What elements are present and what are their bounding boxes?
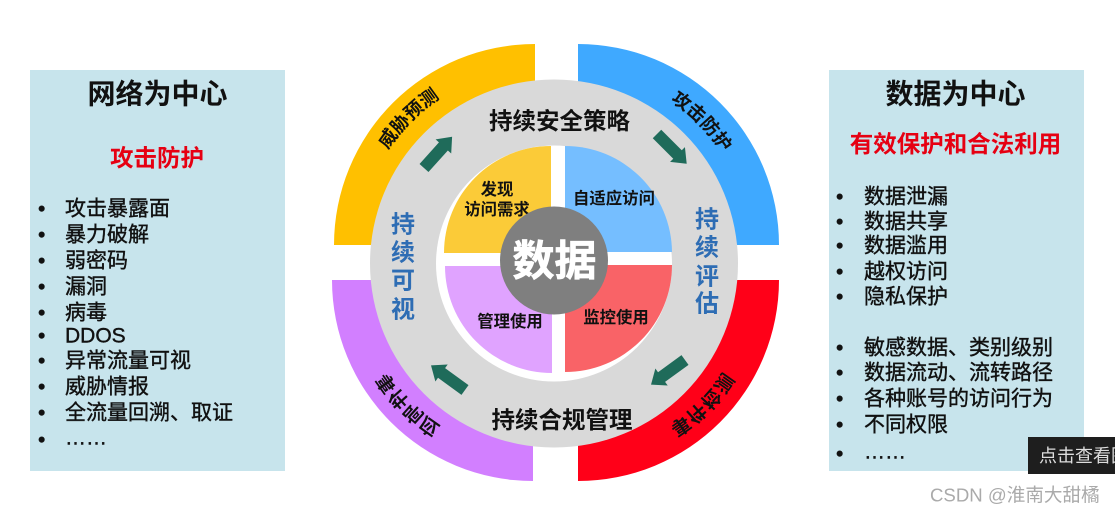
quadrant: adaptive access: [565, 146, 672, 252]
list: network-centric items: [38, 198, 233, 452]
ring label: continuous assessment: 续: [695, 234, 719, 262]
heading: data-centric: 数据为中心: [885, 78, 1026, 110]
inner white disc: [436, 146, 672, 382]
list: network-centric items: •: [38, 250, 45, 272]
ring label: continuous security policy: 持续安全策略: [489, 108, 630, 134]
list: data-centric items: 数据流动、流转路径: [864, 362, 1053, 384]
list: data-centric items: •: [836, 442, 843, 466]
arrow: top right: [650, 127, 694, 171]
list: data-centric items: 数据泄漏: [864, 186, 948, 208]
list: network-centric items: •: [38, 302, 45, 324]
ring label: continuous visibility: [391, 212, 415, 324]
subheading: attack protection: 攻击防护: [110, 145, 204, 171]
list: data-centric items: 不同权限: [864, 414, 948, 436]
list: network-centric items: 异常流量可视: [65, 350, 191, 372]
list: network-centric items: 暴力破解: [65, 224, 149, 246]
arrow: bottom right: [645, 352, 691, 393]
list: data-centric items: [836, 186, 1053, 466]
ring label: continuous visibility: 续: [391, 240, 415, 266]
list: data-centric items: 数据滥用: [864, 234, 948, 258]
list: network-centric items: •: [38, 324, 45, 348]
list: data-centric items: 各种账号的访问行为: [864, 388, 1053, 410]
ring label: continuous visibility: 视: [391, 296, 415, 324]
list: data-centric items: •: [836, 286, 843, 308]
list: data-centric items: •: [836, 260, 843, 284]
list: data-centric items: 敏感数据、类别级别: [864, 336, 1053, 360]
quadrant: manage usage: [445, 266, 552, 373]
outer arc: attack protection: [578, 44, 779, 245]
quadrant label: manage usage: 管理使用: [477, 312, 543, 331]
list: data-centric items: ……: [864, 440, 906, 464]
quadrant label: discover access needs: 发现: [481, 180, 513, 199]
list: data-centric items: •: [836, 414, 843, 436]
list: network-centric items: 全流量回溯、取证: [65, 402, 233, 424]
ring label: continuous assessment: 估: [695, 290, 719, 318]
tooltip: click to view image: [1028, 437, 1115, 474]
label: incident response (mirrored): 事件响应: [374, 374, 441, 438]
list: network-centric items: •: [38, 350, 45, 372]
ring label: continuous visibility: 持: [391, 212, 415, 238]
watermark: CSDN @淮南大甜橘: [930, 484, 1100, 506]
list: network-centric items: 威胁情报: [65, 376, 149, 398]
list: network-centric items: •: [38, 428, 45, 452]
subheading: effective protection and lawful use: 有效保护和合法利用: [850, 131, 1061, 157]
heading: network-centric: 网络为中心: [87, 78, 228, 110]
ring label: continuous assessment: 评: [695, 264, 719, 290]
list: data-centric items: •: [836, 388, 843, 410]
ring label: continuous compliance management: 持续合规管理: [492, 407, 632, 433]
list: data-centric items: •: [836, 186, 843, 208]
list: network-centric items: ……: [65, 426, 107, 450]
outer arc: incident detection: [578, 280, 779, 481]
list: data-centric items: 隐私保护: [864, 286, 948, 308]
center circle: data: 数据: [512, 238, 597, 284]
list: network-centric items: 攻击暴露面: [65, 198, 170, 220]
list: network-centric items: 弱密码: [65, 250, 128, 272]
list: data-centric items: •: [836, 234, 843, 258]
quadrant: monitor usage: [565, 265, 672, 372]
quadrant label: discover access needs: 访问需求: [464, 200, 530, 219]
list: data-centric items: •: [836, 362, 843, 384]
quadrant label: monitor usage: 监控使用: [583, 308, 649, 327]
list: network-centric items: DDOS: [65, 324, 126, 348]
ring label: continuous assessment: [695, 206, 719, 318]
center circle: data: [500, 206, 608, 314]
quadrant label: adaptive access: 自适应访问: [573, 189, 655, 208]
outer arc: incident response: [332, 280, 533, 481]
list: data-centric items: •: [836, 336, 843, 360]
list: data-centric items: •: [836, 210, 843, 234]
list: network-centric items: •: [38, 376, 45, 398]
list: network-centric items: •: [38, 198, 45, 220]
label: threat prediction: 威胁预测: [378, 86, 440, 150]
label: incident detection (mirrored): 事件检测: [672, 372, 736, 438]
list: network-centric items: •: [38, 402, 45, 424]
quadrant label: discover access needs: [464, 180, 530, 219]
ring: continuous processes: [370, 80, 738, 448]
panel: data-centric: [829, 70, 1084, 471]
list: network-centric items: •: [38, 224, 45, 246]
ring label: continuous visibility: 可: [391, 268, 415, 294]
list: network-centric items: 漏洞: [65, 276, 107, 298]
label: attack protection: 攻击防护: [672, 90, 732, 149]
outer arc: threat prediction: [334, 44, 535, 245]
list: network-centric items: •: [38, 276, 45, 298]
panel: network-centric: [30, 70, 285, 471]
arrow: top left: [416, 130, 460, 175]
quadrant: discover access needs: [444, 146, 551, 253]
list: network-centric items: 病毒: [65, 302, 107, 324]
list: data-centric items: 数据共享: [864, 210, 948, 234]
list: data-centric items: 越权访问: [864, 260, 948, 284]
ring label: continuous assessment: 持: [695, 206, 719, 234]
arrow: bottom left: [425, 357, 471, 398]
